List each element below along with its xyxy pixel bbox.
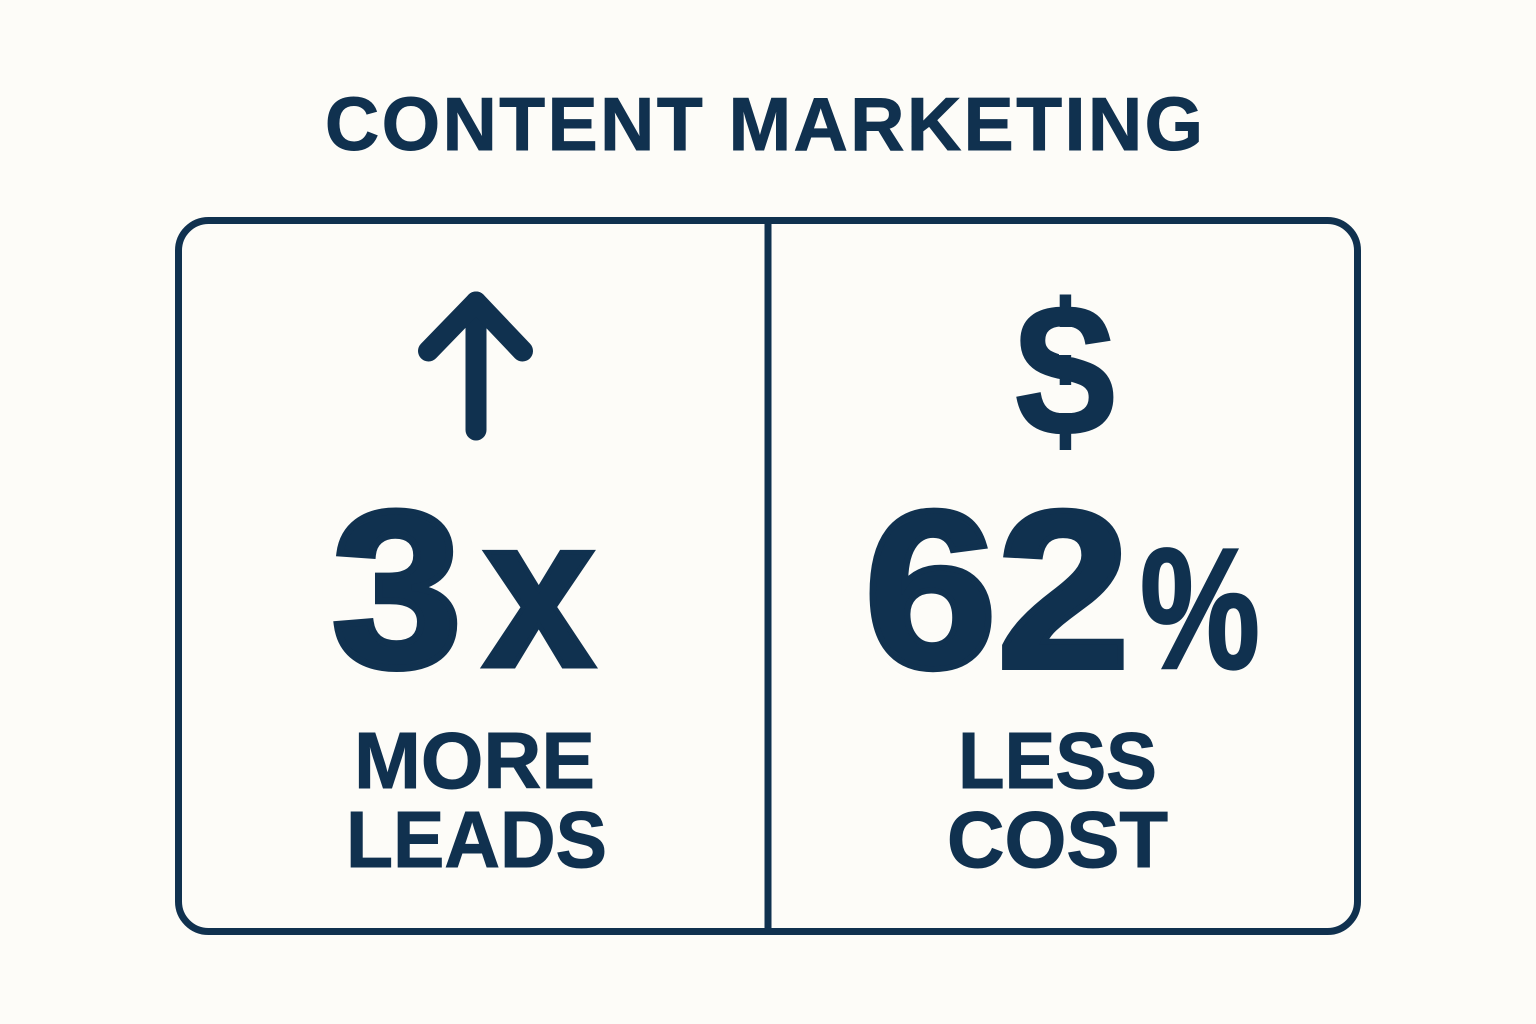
label: more leads: MORE	[354, 716, 595, 805]
stat: 62%	[864, 465, 1260, 715]
panel: less cost	[864, 265, 1260, 884]
stat: 62%: 62	[864, 465, 1130, 715]
panel: comparison frame	[178, 220, 1358, 932]
panel: more leads	[332, 302, 607, 884]
label: more leads: LEADS	[346, 795, 607, 884]
stat: 3x: x	[483, 471, 595, 712]
label: less cost	[947, 716, 1168, 884]
stat: 3x: 3	[332, 466, 462, 714]
stat: 3x	[332, 466, 595, 714]
title: CONTENT MARKETING	[325, 82, 1203, 166]
icon: dollar sign: $	[1015, 265, 1115, 475]
label: more leads	[346, 716, 607, 884]
label: less cost: LESS	[958, 716, 1157, 805]
stat: 62%: %	[1140, 513, 1260, 705]
label: less cost: COST	[947, 795, 1168, 884]
icon: up arrow	[428, 302, 522, 430]
